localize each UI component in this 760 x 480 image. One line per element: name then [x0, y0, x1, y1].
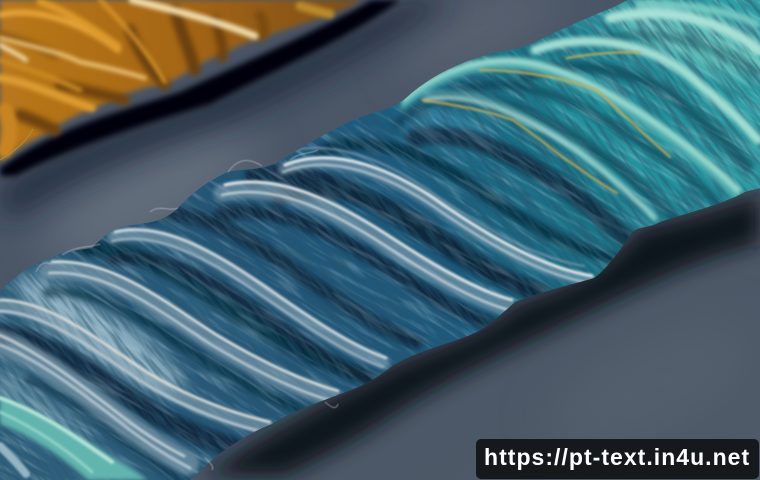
grey and white strand lines [0, 148, 592, 468]
teal strand highlights [0, 398, 112, 474]
stray white fuzz along rope edge [36, 150, 338, 470]
teal strand at bottom left [0, 396, 148, 480]
shadow: under orange yarn [0, 0, 455, 215]
URL text: https://pt-text.in4u.net [484, 444, 750, 470]
URL label [476, 439, 759, 479]
gold threads [423, 52, 670, 193]
pale teal bundles [403, 4, 758, 218]
orange yarn skein [0, 0, 362, 162]
stray orange fibre [0, 129, 33, 160]
soft grey bands beneath the strands [0, 163, 590, 463]
shadow: under blue yarn [205, 194, 760, 476]
